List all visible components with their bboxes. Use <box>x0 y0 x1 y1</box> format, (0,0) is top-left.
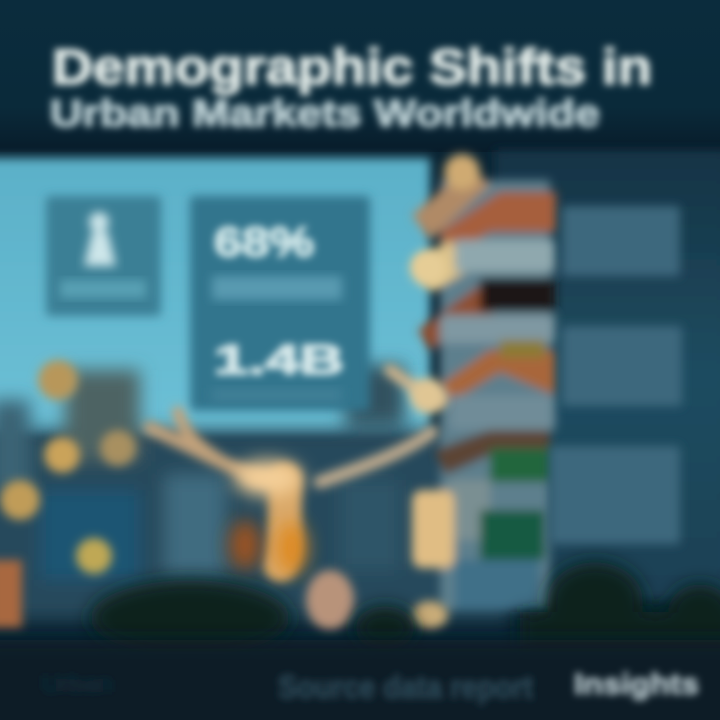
panel: balcony tower <box>412 154 556 610</box>
icon: tree branches <box>150 370 440 565</box>
panel: stat card left <box>46 196 161 316</box>
footer band <box>0 640 720 720</box>
title: Urban Markets Worldwide <box>50 93 600 135</box>
stat caption top <box>212 276 342 300</box>
footer text <box>42 668 699 705</box>
header band <box>0 0 720 152</box>
city midground <box>0 365 510 620</box>
stat caption bottom <box>212 388 342 402</box>
icon: string lights <box>0 250 448 630</box>
panel: stats card centre <box>190 196 370 411</box>
icon: trunk glow <box>229 460 307 574</box>
panel: right cards <box>550 206 682 544</box>
trees silhouette <box>90 562 720 656</box>
card top <box>562 206 680 276</box>
footer text: Urban <box>42 671 112 698</box>
icon: person <box>84 212 116 266</box>
panel: left light blue <box>0 158 430 438</box>
stat number top: 68% <box>214 218 314 265</box>
footer text: Insights <box>574 668 699 701</box>
title: Demographic Shifts in <box>52 39 652 95</box>
card middle <box>562 326 682 406</box>
card bottom <box>550 446 680 544</box>
caption <box>60 280 146 298</box>
footer text: Source data report <box>278 669 533 705</box>
stat number bottom: 1.4B <box>214 336 344 383</box>
title <box>50 39 652 135</box>
panel: right background <box>495 150 720 600</box>
